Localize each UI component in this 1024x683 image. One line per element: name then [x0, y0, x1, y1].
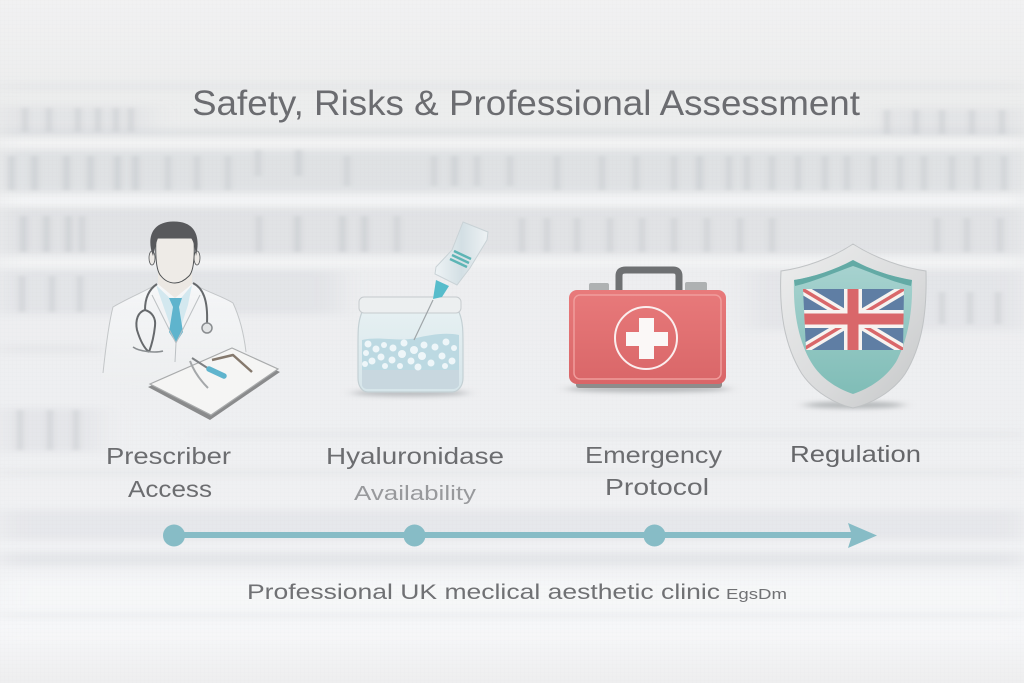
doctor tie: [169, 298, 183, 343]
jar shadow: [352, 390, 468, 396]
shield inner: [794, 260, 912, 394]
icon: first aid kit: [566, 270, 730, 392]
footer caption: EgsDm: [726, 586, 787, 603]
label: Emergency Protocol: [585, 442, 723, 500]
doctor shirt: [156, 285, 192, 342]
label: Emergency Protocol: Protocol: [605, 474, 709, 500]
title: Safety, Risks & Professional Assessment: [192, 84, 860, 123]
shield shadow: [804, 402, 904, 408]
syringe bands: [450, 251, 471, 267]
label: Prescriber Access: Prescriber: [106, 443, 231, 469]
syringe body: [435, 222, 488, 285]
kit handle: [619, 270, 679, 292]
label: Prescriber Access: [106, 443, 231, 502]
label: Emergency Protocol: Emergency: [585, 442, 723, 468]
jar liquid: [362, 334, 459, 389]
kit cross: [626, 318, 668, 359]
syringe hub: [433, 280, 449, 299]
kit emblem ring: [615, 307, 677, 369]
doctor coat: [103, 284, 246, 395]
tools on clipboard: [192, 358, 209, 369]
UK flag: [802, 288, 905, 351]
icon: hyaluronidase jar with syringe: [352, 222, 488, 396]
icon: shield with UK flag: [781, 244, 926, 408]
doctor face: [156, 238, 194, 283]
jar body: [358, 312, 463, 392]
label: Hyaluronidase Availability: Hyaluronidase: [326, 443, 504, 469]
jar lid: [359, 297, 461, 313]
label: Regulation: Regulation: [790, 441, 921, 467]
label: Hyaluronidase Availability: [326, 443, 504, 505]
shield rim: [781, 244, 926, 408]
timeline node 2: [404, 524, 426, 546]
kit latches: [589, 283, 609, 293]
coat lapels: [152, 295, 200, 362]
label: Prescriber Access: Access: [128, 476, 212, 502]
timeline arrowhead: [848, 523, 877, 548]
doctor ears: [149, 251, 155, 265]
kit shadow: [566, 386, 730, 392]
jar beads: [362, 338, 457, 370]
label: Hyaluronidase Availability: Availability: [354, 483, 476, 505]
clipboard: [148, 350, 280, 420]
doctor neck: [158, 270, 192, 298]
doctor hair: [150, 221, 198, 256]
icon: doctor with clipboard: [103, 221, 280, 420]
kit base: [576, 376, 722, 388]
timeline arrow: [163, 523, 877, 548]
timeline node 1: [163, 524, 185, 546]
kit case: [569, 290, 726, 384]
timeline node 3: [644, 524, 666, 546]
needle: [414, 300, 433, 340]
jar lower layer: [362, 370, 459, 389]
stethoscope: [136, 283, 207, 352]
footer caption: Professional UK meclical aesthetic clinic: [247, 580, 720, 604]
